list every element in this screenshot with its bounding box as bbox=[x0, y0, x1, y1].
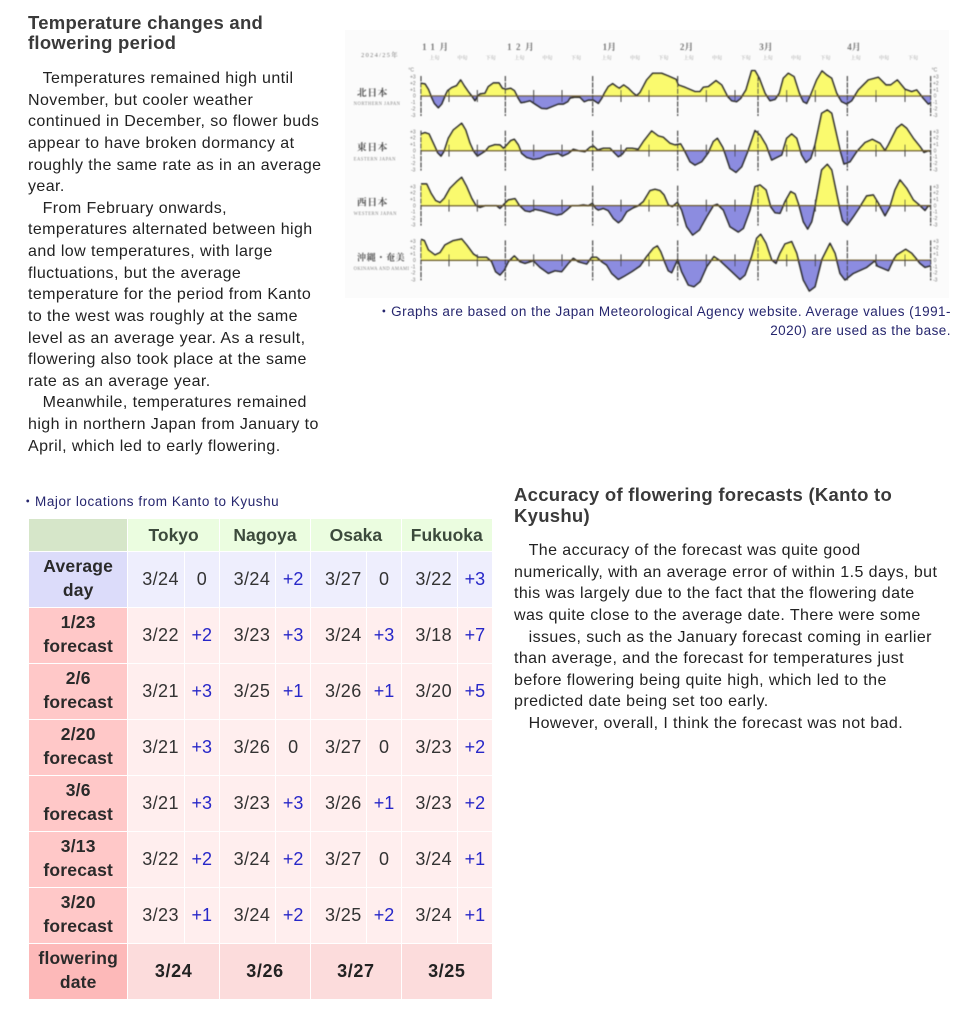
axis scale labels: -3 bbox=[411, 277, 416, 283]
row: 3/20 forecast: +1 bbox=[191, 905, 212, 925]
axis scale labels: +3 bbox=[410, 129, 416, 135]
axis scale labels: 0 bbox=[413, 258, 416, 264]
row: 3/20 forecast: 3/25 bbox=[325, 905, 362, 925]
series: northern Japan bbox=[421, 71, 931, 109]
chart caption: ・Graphs are based on the Japan Meteorological Agency website. Average values (1991- bbox=[377, 304, 951, 319]
row: 1/23 forecast: 3/22 bbox=[142, 625, 179, 645]
row: 3/13 forecast: +2 bbox=[191, 849, 212, 869]
text block: temperature discussion: April, which led to early flowering. bbox=[28, 438, 281, 455]
axis scale labels: +3 bbox=[410, 75, 416, 81]
text block: temperature discussion: rate as an average year. bbox=[28, 373, 211, 390]
chart header: months and decades: 下旬 bbox=[908, 55, 918, 62]
axis scale labels: +1 bbox=[410, 197, 416, 203]
chart header: months and decades: 中旬 bbox=[712, 55, 722, 62]
row: 3/20 forecast: +1 bbox=[465, 905, 485, 925]
text block: temperature discussion: Temperatures remained high until bbox=[43, 70, 294, 87]
row: 2/6 forecast: +1 bbox=[283, 681, 303, 701]
row: 2/20 forecast: 3/23 bbox=[415, 737, 452, 757]
series: eastern Japan bbox=[421, 110, 931, 172]
text block: forecast accuracy: The accuracy of the forecast was quite good bbox=[529, 542, 861, 559]
axis scale labels: -2 bbox=[933, 161, 938, 167]
axis scale labels: +3 bbox=[933, 184, 939, 190]
text block: forecast accuracy: issues, such as the January forecast coming in earlier bbox=[529, 628, 932, 646]
row: 2/6 forecast: 3/21 bbox=[142, 681, 179, 701]
row: 1/23 forecast: 3/18 bbox=[415, 625, 452, 645]
row: 3/6 forecast: 3/26 bbox=[325, 793, 362, 813]
region labels: 沖縄・奄美 bbox=[357, 252, 405, 263]
text block: temperature discussion: to the west was roughly at the same bbox=[28, 308, 298, 325]
chart header: months and decades: 中旬 bbox=[457, 55, 467, 62]
text block: forecast accuracy: before flowering being quite high, which led to the bbox=[514, 672, 887, 689]
text block: temperature discussion: roughly the same rate as in an average bbox=[28, 156, 321, 174]
text block: forecast accuracy: However, overall, I think the forecast was not bad. bbox=[529, 715, 903, 732]
axis scale labels: -2 bbox=[933, 216, 938, 222]
row: 2/6 forecast: forecast bbox=[43, 692, 113, 712]
text block: temperature discussion: November, but cooler weather bbox=[28, 92, 253, 109]
axis scale labels: -2 bbox=[411, 271, 416, 277]
axis scale labels: -2 bbox=[933, 271, 938, 277]
axis scale labels: 0 bbox=[413, 203, 416, 209]
row: 2/20 forecast: +2 bbox=[465, 737, 485, 757]
table caption: ・Major locations from Kanto to Kyushu bbox=[21, 494, 279, 509]
table header row: Osaka bbox=[330, 524, 382, 544]
chart header: months and decades: 11月 bbox=[422, 42, 453, 52]
region labels: EASTERN JAPAN bbox=[354, 157, 396, 162]
region labels: 東日本 bbox=[357, 142, 388, 154]
axis scale labels: +3 bbox=[933, 75, 939, 81]
row: 3/13 forecast: 3/22 bbox=[142, 849, 179, 869]
axis scale labels: -1 bbox=[933, 100, 938, 106]
text block: temperature discussion: Meanwhile, temperatures remained bbox=[43, 394, 307, 411]
row: 3/13 forecast: 3/13 bbox=[61, 836, 96, 856]
row: flowering date bbox=[29, 944, 492, 999]
region labels: WESTERN JAPAN bbox=[354, 212, 397, 217]
text block: temperature discussion: From February onwards, bbox=[43, 200, 227, 217]
heading: temperature changes: flowering period bbox=[28, 32, 176, 53]
chart header: months and decades: 下旬 bbox=[658, 55, 668, 62]
text block: forecast accuracy: was quite close to the average date. There were some bbox=[514, 607, 921, 624]
chart header: months and decades: 3月 bbox=[759, 42, 773, 52]
table header row: Fukuoka bbox=[411, 524, 483, 544]
heading: forecast accuracy: Accuracy of flowering forecasts (Kanto to bbox=[514, 484, 892, 505]
row: average day: 0 bbox=[197, 569, 207, 589]
row: flowering date: 3/27 bbox=[337, 961, 375, 981]
text block: forecast accuracy: this was largely due to the fact that the flowering date bbox=[514, 585, 915, 602]
row: 3/13 forecast: forecast bbox=[43, 860, 113, 880]
heading: forecast accuracy bbox=[514, 484, 892, 526]
row: 3/13 forecast bbox=[29, 832, 492, 887]
row: average day: 3/22 bbox=[415, 569, 452, 589]
text block: temperature discussion: fluctuations, but the average bbox=[28, 265, 241, 282]
axis scale labels: -2 bbox=[411, 216, 416, 222]
row: average day bbox=[28, 552, 492, 608]
axis scale labels: +2 bbox=[933, 245, 939, 251]
chart header: months and decades: 下旬 bbox=[571, 55, 581, 62]
row: 3/20 forecast: +2 bbox=[374, 905, 394, 925]
row: flowering date: 3/24 bbox=[155, 961, 192, 981]
axis scale labels: +3 bbox=[410, 239, 416, 245]
text block: temperature discussion: temperature for the period from Kanto bbox=[28, 286, 311, 303]
axis scale labels: -3 bbox=[933, 277, 938, 283]
region labels: OKINAWA AND AMAMI bbox=[354, 267, 410, 272]
axis scale labels: +1 bbox=[410, 252, 416, 258]
row: 1/23 forecast: 1/23 bbox=[61, 612, 96, 632]
text block: temperature discussion: year. bbox=[28, 178, 65, 195]
row: 2/6 forecast: 3/25 bbox=[234, 681, 270, 701]
row: flowering date: 3/26 bbox=[246, 961, 284, 981]
row: 2/20 forecast: 3/26 bbox=[234, 737, 270, 757]
chart: temperature anomaly by region bbox=[353, 42, 940, 293]
row: 3/13 forecast: +2 bbox=[283, 849, 303, 869]
axis scale labels: °C bbox=[408, 67, 414, 73]
series: Okinawa and Amami bbox=[421, 234, 931, 291]
chart header: months and decades: 上旬 bbox=[602, 55, 612, 62]
row: 3/6 forecast: +3 bbox=[283, 793, 303, 813]
axis scale labels: +1 bbox=[933, 197, 939, 203]
table: flowering forecasts by city bbox=[29, 519, 492, 999]
chart header: months and decades: 中旬 bbox=[879, 55, 889, 62]
text block: forecast accuracy: than average, and the forecast for temperatures just bbox=[514, 650, 904, 667]
axis scale labels: +1 bbox=[933, 252, 939, 258]
chart header: months and decades: 上旬 bbox=[514, 55, 524, 62]
text block: forecast accuracy bbox=[514, 542, 937, 732]
row: 3/6 forecast bbox=[29, 776, 492, 831]
row: average day: 3/27 bbox=[325, 569, 362, 589]
axis scale labels: 0 bbox=[934, 94, 937, 100]
row: 3/20 forecast: 3/24 bbox=[234, 905, 270, 925]
row: flowering date: date bbox=[60, 972, 97, 992]
chart header: months and decades: 下旬 bbox=[486, 55, 496, 62]
table header row bbox=[29, 519, 492, 999]
row: 1/23 forecast: forecast bbox=[43, 636, 113, 656]
axis scale labels: +2 bbox=[410, 245, 416, 251]
row: 2/20 forecast: 2/20 bbox=[61, 724, 96, 744]
axis scale labels: -3 bbox=[411, 223, 416, 229]
row: 1/23 forecast: +3 bbox=[283, 625, 303, 645]
row: average day: Average bbox=[43, 556, 113, 576]
region labels: NORTHERN JAPAN bbox=[354, 102, 401, 107]
axis scale labels: -1 bbox=[933, 210, 938, 216]
row: 3/13 forecast: 0 bbox=[379, 849, 389, 869]
axis scale labels: -3 bbox=[411, 113, 416, 119]
row: 1/23 forecast: +3 bbox=[374, 625, 394, 645]
axes and ticks bbox=[421, 76, 931, 280]
row: 3/20 forecast: +2 bbox=[283, 905, 303, 925]
row: 2/6 forecast: +1 bbox=[374, 681, 394, 701]
region labels bbox=[354, 87, 410, 272]
row: flowering date: flowering bbox=[38, 948, 118, 968]
axis scale labels: +1 bbox=[410, 87, 416, 93]
heading: temperature changes: Temperature changes and bbox=[28, 12, 263, 33]
row: 1/23 forecast: +2 bbox=[191, 625, 212, 645]
row: 3/13 forecast: +1 bbox=[465, 849, 485, 869]
axis scale labels: 0 bbox=[934, 258, 937, 264]
row: average day: +2 bbox=[283, 569, 303, 589]
table header row: Tokyo bbox=[148, 524, 199, 544]
row: 3/6 forecast: 3/23 bbox=[234, 793, 270, 813]
axis scale labels: +3 bbox=[933, 239, 939, 245]
text block: temperature discussion: continued in December, so flower buds bbox=[28, 113, 319, 130]
row: 1/23 forecast: 3/23 bbox=[234, 625, 270, 645]
axis scale labels: 0 bbox=[934, 203, 937, 209]
row: 2/20 forecast: 0 bbox=[379, 737, 389, 757]
row: 3/20 forecast bbox=[29, 888, 492, 943]
row: average day: 3/24 bbox=[234, 569, 270, 589]
row: 3/6 forecast: 3/6 bbox=[66, 780, 91, 800]
axis scale labels: +2 bbox=[933, 81, 939, 87]
row: 3/20 forecast: 3/20 bbox=[61, 892, 96, 912]
chart header: months and decades: 下旬 bbox=[741, 55, 751, 62]
row: 3/13 forecast: 3/24 bbox=[234, 849, 270, 869]
chart header: months and decades: 2024/25年 bbox=[361, 50, 399, 59]
chart caption: 2020) are used as the base. bbox=[770, 323, 951, 338]
text block: temperature discussion: temperatures alternated between high bbox=[28, 221, 313, 238]
chart caption bbox=[377, 304, 951, 338]
axis scale labels: -1 bbox=[411, 264, 416, 270]
chart header: months and decades: 2月 bbox=[680, 42, 693, 52]
row: 3/6 forecast: forecast bbox=[43, 804, 113, 824]
axis scale labels: -3 bbox=[933, 113, 938, 119]
row: average day: day bbox=[63, 580, 94, 600]
row: 2/20 forecast bbox=[29, 720, 492, 775]
axis scale labels: +3 bbox=[933, 129, 939, 135]
axis scale labels: -3 bbox=[933, 168, 938, 174]
row: 2/20 forecast: 3/21 bbox=[142, 737, 179, 757]
chart header: months and decades: 上旬 bbox=[763, 55, 773, 62]
axis scale labels: -2 bbox=[411, 161, 416, 167]
row: 2/6 forecast bbox=[29, 664, 492, 719]
row: average day: 0 bbox=[379, 569, 389, 589]
text block: temperature discussion: level as an average year. As a result, bbox=[28, 330, 305, 346]
axis scale labels: +1 bbox=[933, 142, 939, 148]
row: 3/6 forecast: +1 bbox=[374, 793, 394, 813]
row: 3/13 forecast: 3/24 bbox=[415, 849, 452, 869]
row: 3/6 forecast: 3/23 bbox=[415, 793, 452, 813]
axis scale labels: +2 bbox=[410, 81, 416, 87]
row: 2/6 forecast: 2/6 bbox=[66, 668, 91, 688]
text block: forecast accuracy: numerically, with an average error of within 1.5 days, but bbox=[514, 564, 937, 581]
row: 1/23 forecast: +7 bbox=[465, 625, 485, 645]
row: 3/13 forecast: 3/27 bbox=[325, 849, 362, 869]
row: 2/6 forecast: +3 bbox=[191, 681, 212, 701]
row: 1/23 forecast bbox=[29, 608, 492, 663]
row: 3/6 forecast: 3/21 bbox=[142, 793, 179, 813]
chart header: months and decades: 下旬 bbox=[820, 55, 830, 62]
axis scale labels: 0 bbox=[413, 148, 416, 154]
chart header: months and decades: 4月 bbox=[847, 42, 861, 52]
chart header: months and decades: 中旬 bbox=[542, 55, 552, 62]
chart header: months and decades: 12月 bbox=[507, 42, 538, 52]
text block: temperature discussion: high in northern Japan from January to bbox=[28, 416, 319, 433]
axis scale labels: -3 bbox=[933, 223, 938, 229]
table header row: Nagoya bbox=[233, 524, 297, 544]
axis scale labels: -1 bbox=[411, 155, 416, 161]
axis scale labels: -1 bbox=[933, 155, 938, 161]
axis scale labels: °C bbox=[932, 67, 938, 73]
text block: temperature discussion bbox=[28, 70, 321, 455]
row: 2/20 forecast: 0 bbox=[288, 737, 298, 757]
heading: temperature changes bbox=[28, 12, 263, 53]
axis scale labels: -1 bbox=[411, 100, 416, 106]
row: 1/23 forecast: 3/24 bbox=[325, 625, 362, 645]
text block: temperature discussion: and low temperatures, with large bbox=[28, 243, 273, 260]
text block: forecast accuracy: predicted date being set too early. bbox=[514, 693, 769, 710]
axis scale labels: 0 bbox=[934, 148, 937, 154]
chart header: months and decades: 上旬 bbox=[684, 55, 694, 62]
axis scale labels: 0 bbox=[413, 94, 416, 100]
row: average day: +3 bbox=[465, 569, 485, 589]
chart header: months and decades: 中旬 bbox=[630, 55, 640, 62]
heading: forecast accuracy: Kyushu) bbox=[514, 505, 590, 526]
axis scale labels: +3 bbox=[410, 184, 416, 190]
axis scale labels: +2 bbox=[933, 136, 939, 142]
row: 2/6 forecast: +5 bbox=[465, 681, 485, 701]
axis scale labels: +2 bbox=[933, 191, 939, 197]
series: western Japan bbox=[421, 164, 931, 235]
axis scale labels: -1 bbox=[411, 210, 416, 216]
row: 3/6 forecast: +3 bbox=[191, 793, 212, 813]
row: 2/6 forecast: 3/20 bbox=[415, 681, 452, 701]
row: 2/20 forecast: 3/27 bbox=[325, 737, 362, 757]
axis scale labels bbox=[408, 67, 939, 283]
axis scale labels: +1 bbox=[933, 87, 939, 93]
row: flowering date: 3/25 bbox=[428, 961, 466, 981]
axis scale labels: +1 bbox=[410, 142, 416, 148]
row: 3/20 forecast: 3/23 bbox=[142, 905, 179, 925]
row: 3/20 forecast: forecast bbox=[43, 916, 113, 936]
chart header: months and decades: 中旬 bbox=[791, 55, 801, 62]
row: 2/20 forecast: forecast bbox=[43, 748, 113, 768]
axis scale labels: -2 bbox=[411, 106, 416, 112]
axis scale labels: +2 bbox=[410, 191, 416, 197]
row: 2/6 forecast: 3/26 bbox=[325, 681, 362, 701]
row: average day: 3/24 bbox=[142, 569, 179, 589]
chart header: months and decades: 1月 bbox=[603, 42, 616, 52]
row: 3/20 forecast: 3/24 bbox=[415, 905, 452, 925]
axis scale labels: +2 bbox=[410, 136, 416, 142]
row: 3/6 forecast: +2 bbox=[465, 793, 485, 813]
text block: temperature discussion: flowering also took place at the same bbox=[28, 351, 307, 368]
row: 2/20 forecast: +3 bbox=[191, 737, 212, 757]
chart header: months and decades: 上旬 bbox=[429, 55, 439, 62]
chart header: months and decades bbox=[361, 42, 918, 62]
axis scale labels: -1 bbox=[933, 264, 938, 270]
axis scale labels: -3 bbox=[411, 168, 416, 174]
region labels: 西日本 bbox=[357, 197, 388, 209]
chart header: months and decades: 上旬 bbox=[851, 55, 861, 62]
region labels: 北日本 bbox=[357, 87, 388, 99]
axis scale labels: -2 bbox=[933, 106, 938, 112]
text block: temperature discussion: appear to have broken dormancy at bbox=[28, 135, 294, 152]
